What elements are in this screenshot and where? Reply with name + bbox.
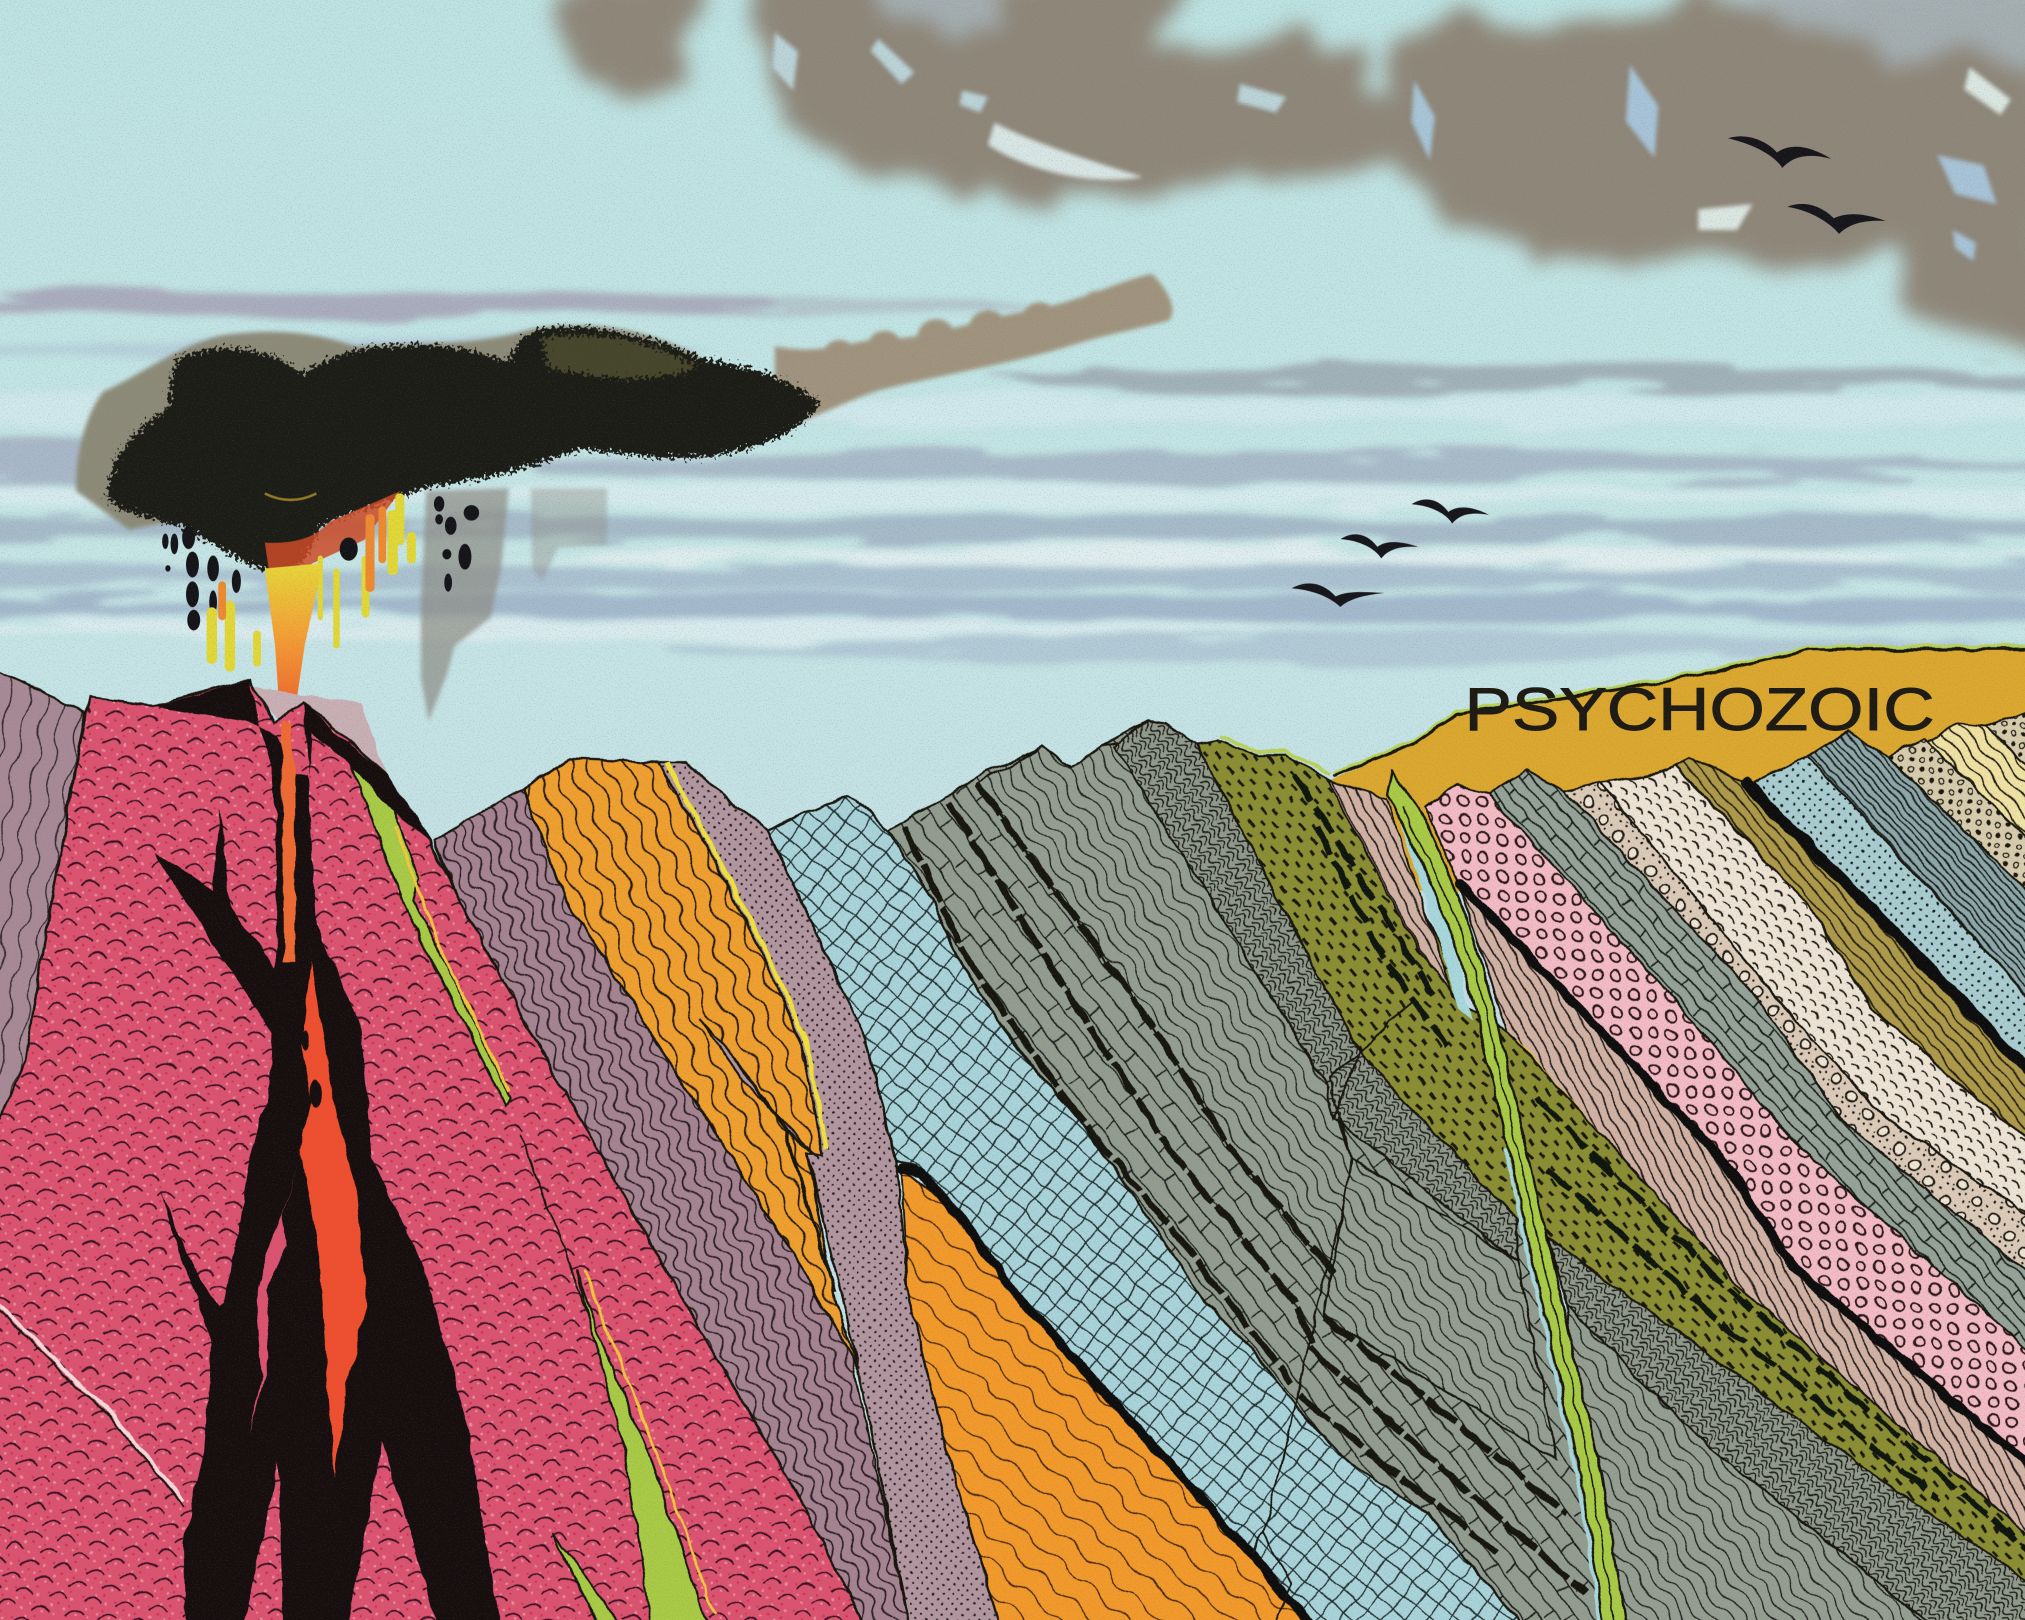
wavy grey sub-band [976, 743, 1351, 1274]
green dyke crossing the strata [1387, 771, 1627, 1620]
falling volcanic bombs and lava drips [162, 493, 479, 723]
pink streak inside conduit [248, 1156, 301, 1437]
wavy grey below chain band [1324, 1158, 1556, 1460]
central grey strata [887, 721, 2025, 1620]
dark streaks in grey strata [905, 784, 1586, 1593]
upper orange stratum [523, 758, 859, 1369]
pale blue hatched stratum [767, 796, 1526, 1620]
green vein, lower left [551, 1267, 714, 1620]
right-hand strata stack [1424, 708, 2025, 1541]
far-left mauve stratum [0, 668, 85, 1145]
Psychozoic stratum [1328, 646, 2025, 891]
volcanic ash cloud [76, 325, 820, 576]
conduit side branches [155, 807, 300, 1053]
lava core [301, 960, 367, 1479]
chain-pattern sub-band [1115, 721, 1359, 1119]
birds, middle [1291, 499, 1489, 607]
wavy mauve stratum [433, 788, 910, 1620]
lower orange stratum [901, 1168, 1315, 1620]
smoke trail [775, 274, 1172, 426]
strata and volcano group [0, 646, 2025, 1620]
tan wedge beside green vein [1328, 780, 1467, 1008]
stippled mauve stratum [659, 762, 1001, 1620]
birds, upper right [1728, 136, 1886, 234]
volcano cone [0, 680, 868, 1620]
olive stratum [1196, 736, 2025, 1586]
thin fault line [1250, 1000, 1413, 1620]
grey strata right of vein [1567, 1305, 1937, 1620]
ash rain columns [421, 488, 607, 721]
label: PSYCHOZOIC: PSYCHOZOIC [1465, 675, 1935, 743]
green vein on the volcano flank [353, 767, 510, 1106]
volcanic conduit [152, 680, 501, 1620]
grey storm cloud [568, 0, 2025, 349]
thick black contact lines [1459, 783, 2025, 1545]
